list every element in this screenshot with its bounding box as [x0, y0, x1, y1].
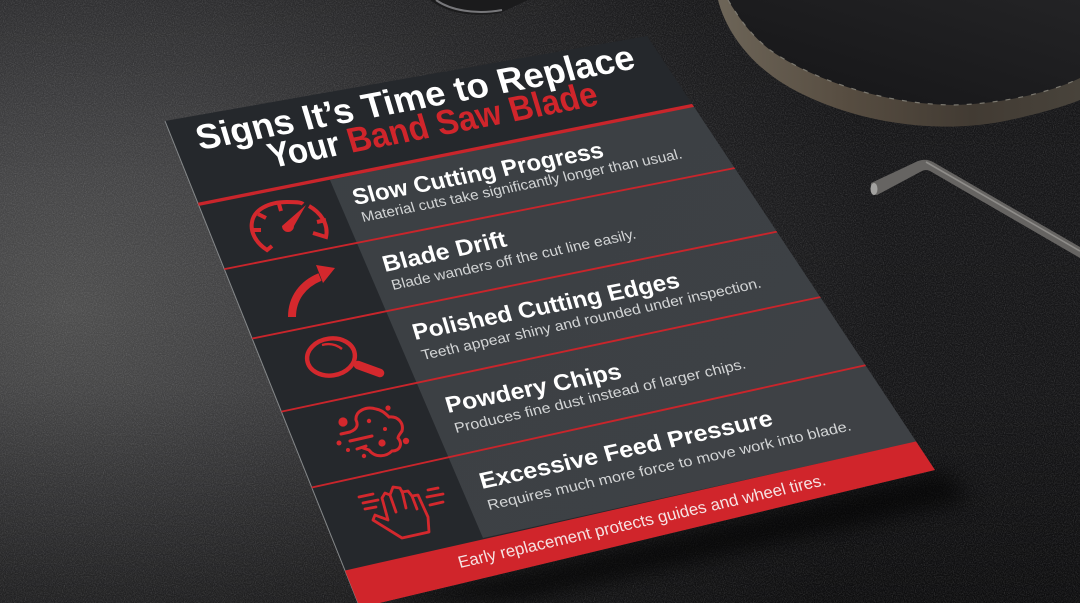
card shadow [372, 470, 970, 603]
band saw blade coil [718, 0, 1080, 127]
row 5: excessive feed pressure [359, 405, 853, 538]
icon: magnifying glass [305, 335, 380, 379]
row 3: polished cutting edges [305, 268, 763, 379]
description: Produces fine dust instead of larger chips. [452, 356, 748, 437]
red footer band [343, 441, 940, 603]
row 2: blade drift [292, 226, 638, 317]
heading: Polished Cutting Edges [409, 268, 683, 345]
heading: Slow Cutting Progress [349, 137, 606, 210]
row 1: slow cutting progress [252, 137, 684, 250]
dark card base [165, 36, 935, 603]
metal object at top edge [430, 0, 528, 15]
light content panel [330, 103, 920, 538]
title: Your Band Saw Blade [263, 76, 602, 176]
heading: Excessive Feed Pressure [476, 405, 776, 494]
flyer card [165, 36, 940, 603]
hex key [870, 160, 1080, 258]
icon: dust cloud [336, 405, 409, 458]
card left edge highlight [165, 121, 358, 603]
title: Signs It’s Time to Replace [191, 39, 639, 158]
icon: curved arrow [292, 265, 335, 317]
red dividers [190, 104, 880, 489]
description: Teeth appear shiny and rounded under inspection. [419, 276, 763, 364]
heading: Blade Drift [379, 226, 510, 277]
description: Blade wanders off the cut line easily. [389, 226, 638, 294]
heading: Powdery Chips [442, 358, 624, 418]
footer note: Early replacement protects guides and wheel tires. [456, 471, 828, 572]
icon: speedometer [252, 202, 327, 250]
description: Material cuts take significantly longer than usual. [359, 146, 684, 226]
row 4: powdery chips [336, 356, 748, 458]
description: Requires much more force to move work into blade. [485, 418, 853, 514]
icon: pushing hand [359, 487, 443, 538]
